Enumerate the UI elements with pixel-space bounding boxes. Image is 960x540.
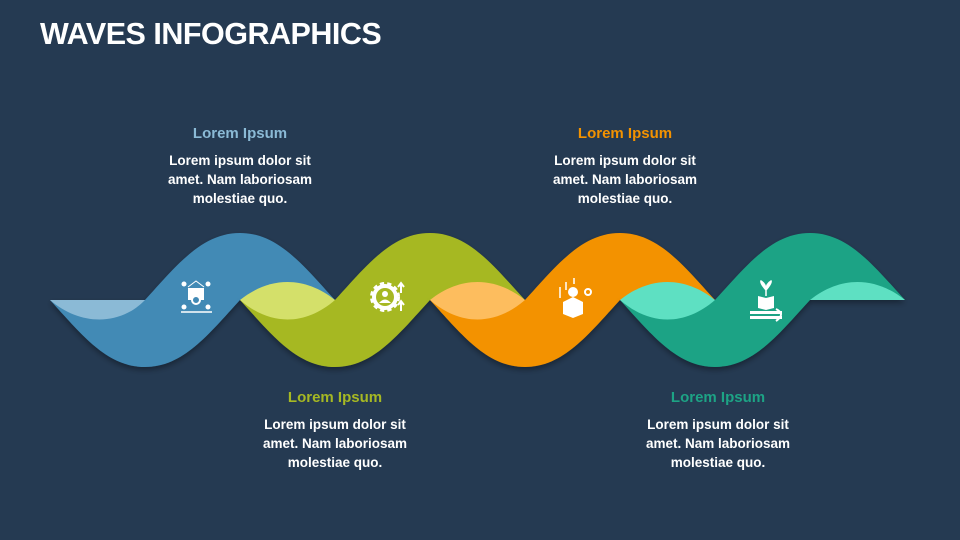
wave: blue segment <box>50 233 335 367</box>
lens: light green <box>240 282 335 320</box>
text block: step 3: molestiae quo. <box>578 191 672 206</box>
text block: step 2: Lorem ipsum dolor sit <box>264 417 406 432</box>
text block: step 3: amet. Nam laboriosam <box>553 172 697 187</box>
text block: step 1: amet. Nam laboriosam <box>168 172 312 187</box>
icon: gear with person <box>372 283 404 311</box>
text block: step 2 <box>263 389 407 470</box>
text block: step 4: molestiae quo. <box>671 455 765 470</box>
icon: book with plant <box>750 281 782 321</box>
text block: step 2: molestiae quo. <box>288 455 382 470</box>
wave: orange segment <box>430 233 715 367</box>
text block: step 4 <box>646 389 790 470</box>
lens: right light teal <box>810 282 905 300</box>
lens: light teal <box>620 282 715 320</box>
lens: light orange <box>430 282 525 320</box>
text block: step 1: Lorem Ipsum <box>193 125 287 142</box>
lens: light blue <box>50 300 145 320</box>
text block: step 3: Lorem Ipsum <box>578 125 672 142</box>
text block: step 3 <box>553 125 697 206</box>
icon: idea box <box>560 278 591 318</box>
text block: step 1: molestiae quo. <box>193 191 287 206</box>
text block: step 4: Lorem Ipsum <box>671 389 765 406</box>
text block: step 1 <box>168 125 312 206</box>
title: WAVES INFOGRAPHICS <box>40 17 381 51</box>
text block: step 3: Lorem ipsum dolor sit <box>554 153 696 168</box>
wave: green segment <box>240 233 525 367</box>
text block: step 4: amet. Nam laboriosam <box>646 436 790 451</box>
text block: step 1: Lorem ipsum dolor sit <box>169 153 311 168</box>
text block: step 2: Lorem Ipsum <box>288 389 382 406</box>
wave: teal segment <box>620 233 905 367</box>
text block: step 2: amet. Nam laboriosam <box>263 436 407 451</box>
text block: step 4: Lorem ipsum dolor sit <box>647 417 789 432</box>
icon: team network <box>181 281 212 312</box>
